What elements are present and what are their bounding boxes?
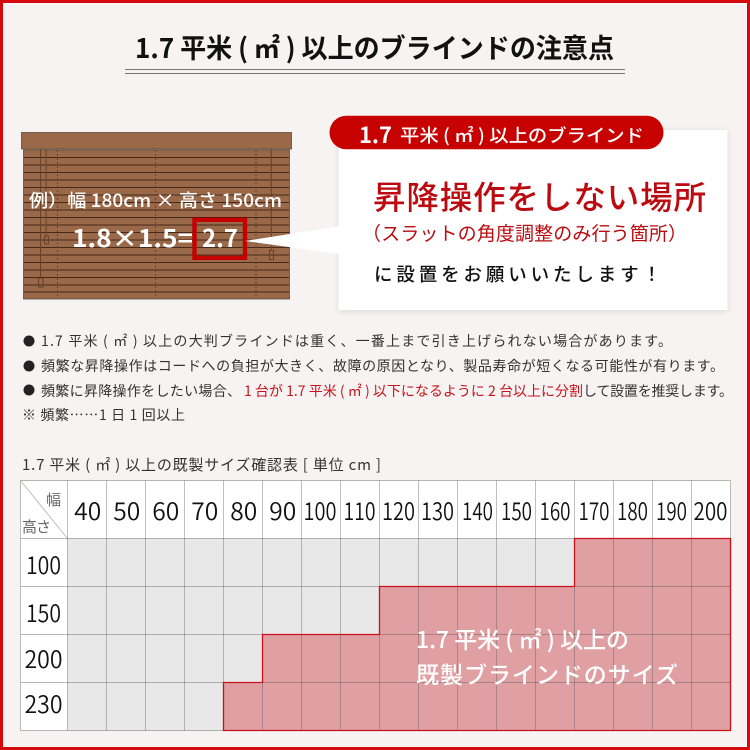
highlighted area label: 1.7 平米 ( ㎡ ) 以上の — [416, 621, 629, 655]
note 4: ※ 頻繁……1 日 1 回以上 — [22, 405, 185, 425]
callout sub text: （スラットの角度調整のみ行う箇所） — [362, 219, 687, 246]
height row headings: 100 — [26, 546, 61, 581]
pill heading: 1.7 — [359, 118, 392, 150]
pill heading — [330, 116, 664, 150]
note 3 — [24, 381, 733, 401]
illustration: wooden blind with example calculation — [22, 132, 292, 299]
width column headings: 110 — [344, 492, 376, 527]
highlighted result — [194, 219, 245, 258]
callout pointer — [245, 226, 340, 254]
width column headings: 70 — [191, 492, 218, 527]
width column headings: 130 — [421, 492, 454, 527]
width column headings: 40 — [74, 492, 101, 527]
width column headings: 170 — [578, 492, 610, 527]
width column headings: 200 — [694, 492, 728, 527]
corner axis labels: 幅 — [46, 489, 61, 510]
pill heading: 平米 ( ㎡ ) 以上のブラインド — [400, 122, 644, 148]
callout panel: place without lifting — [245, 116, 728, 310]
height row headings: 230 — [24, 685, 62, 720]
highlighted area label — [416, 621, 678, 690]
highlighted area: 1.7 square metres or larger — [224, 538, 730, 730]
callout main text: 昇降操作をしない場所 — [373, 172, 706, 219]
size table — [20, 480, 731, 731]
height row headings: 150 — [26, 594, 61, 629]
highlighted area label: 既製ブラインドのサイズ — [416, 656, 678, 690]
note 2: 頻繁な昇降操作はコードへの負担が大きく、故障の原因となり、製品寿命が短くなる可能性が有ります。 — [41, 356, 724, 376]
note 3: 頻繁に昇降操作をしたい場合、 — [41, 381, 241, 401]
width column headings: 60 — [152, 492, 179, 527]
note 3: して設置を推奨します。 — [583, 381, 733, 401]
title: 1.7 平米 ( ㎡ ) 以上のブラインドの注意点 — [135, 27, 614, 66]
width column headings: 140 — [462, 492, 493, 527]
width column headings: 50 — [113, 492, 140, 527]
width column headings: 190 — [656, 492, 687, 527]
corner axis labels: 高さ — [22, 516, 51, 537]
note 3: 1 台が 1.7 平米 ( ㎡ ) 以下になるように 2 台以上に分割 — [244, 381, 583, 401]
width column headings: 100 — [304, 492, 336, 527]
width column headings — [74, 492, 728, 527]
note 1: 1.7 平米 ( ㎡ ) 以上の大判ブラインドは重く、一番上まで引き上げられない場合があります。 — [41, 331, 672, 351]
calculation text: 1.8×1.5= — [72, 219, 193, 254]
height row headings — [24, 546, 62, 720]
width column headings: 120 — [382, 492, 415, 527]
example dimensions text: 例）幅 180cm × 高さ 150cm — [29, 187, 282, 213]
corner axis labels — [22, 489, 61, 537]
size table caption: 1.7 平米 ( ㎡ ) 以上の既製サイズ確認表 [ 単位 cm ] — [22, 454, 381, 475]
height row headings: 200 — [24, 640, 62, 675]
callout closing text: に設置をお願いいたします！ — [374, 261, 661, 287]
width column headings: 80 — [230, 492, 257, 527]
notes list — [22, 331, 733, 425]
width column headings: 90 — [269, 492, 296, 527]
width column headings: 160 — [540, 492, 570, 527]
highlighted result: 2.7 — [202, 219, 238, 254]
width column headings: 150 — [501, 492, 532, 527]
width column headings: 180 — [617, 492, 648, 527]
